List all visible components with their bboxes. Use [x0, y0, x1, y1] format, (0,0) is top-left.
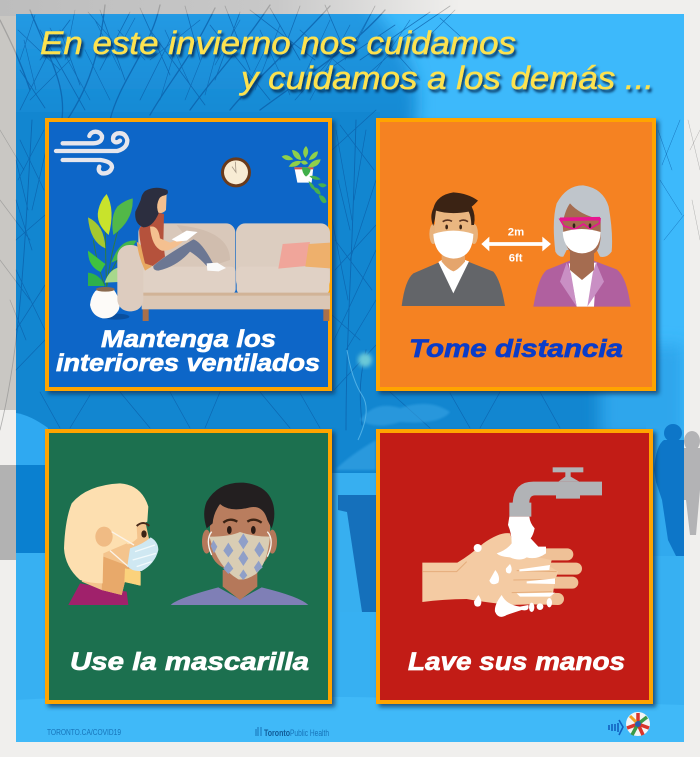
man with mask [402, 192, 505, 306]
illustration: two masked people 2m apart [402, 185, 631, 307]
woman with mask and glasses [533, 185, 631, 307]
footer: Toronto Public Health logo: Toronto [264, 728, 290, 738]
icon: wall clock [221, 157, 251, 187]
icon: distance arrow [481, 227, 551, 264]
sofa [117, 223, 330, 321]
panel: wash hands [378, 431, 651, 702]
footer: website: TORONTO.CA/COVID19 [47, 728, 121, 737]
trash bin in the snow [338, 495, 376, 612]
illustration: two people in masks [64, 483, 308, 605]
icon: tap [509, 467, 602, 517]
caption: keep distance: Tome distancia [409, 335, 623, 363]
man with patterned cloth mask [171, 483, 308, 605]
caption: ventilate: Mantenga los [101, 326, 276, 353]
walking person silhouette [654, 424, 684, 556]
caption: ventilate [56, 326, 320, 377]
panel: keep distance [378, 120, 654, 389]
caption: wear a mask: Use la mascarilla [70, 648, 309, 676]
title [40, 25, 654, 96]
woman [135, 188, 226, 271]
street lamp [347, 350, 372, 440]
panel: ventilate interiors [47, 120, 330, 389]
panel: wear a mask [47, 431, 330, 702]
footer: Toronto Public Health logo: Public Health [290, 728, 329, 738]
icon: hands [422, 533, 576, 605]
water and soap [474, 517, 555, 617]
caption: ventilate: interiores ventilados [56, 350, 320, 377]
snowy bush [360, 404, 450, 426]
title: En este invierno nos cuidamos [40, 25, 516, 61]
title: y cuidamos a los demás ... [239, 60, 654, 96]
icon: arrows and colourful logo [609, 712, 650, 736]
icon: distance arrow: 2m [508, 227, 524, 239]
illustration: woman reading on a sofa [56, 132, 330, 321]
icon: hanging plant [282, 146, 327, 203]
icon: floor plant [88, 194, 137, 320]
caption: wash hands: Lave sus manos [408, 648, 625, 676]
icon: wind [56, 132, 127, 173]
icon: distance arrow: 6ft [509, 252, 523, 264]
woman in profile with surgical mask [64, 483, 158, 605]
footer: Toronto Public Health logo [256, 727, 329, 738]
illustration: hands under a running tap [422, 467, 602, 617]
